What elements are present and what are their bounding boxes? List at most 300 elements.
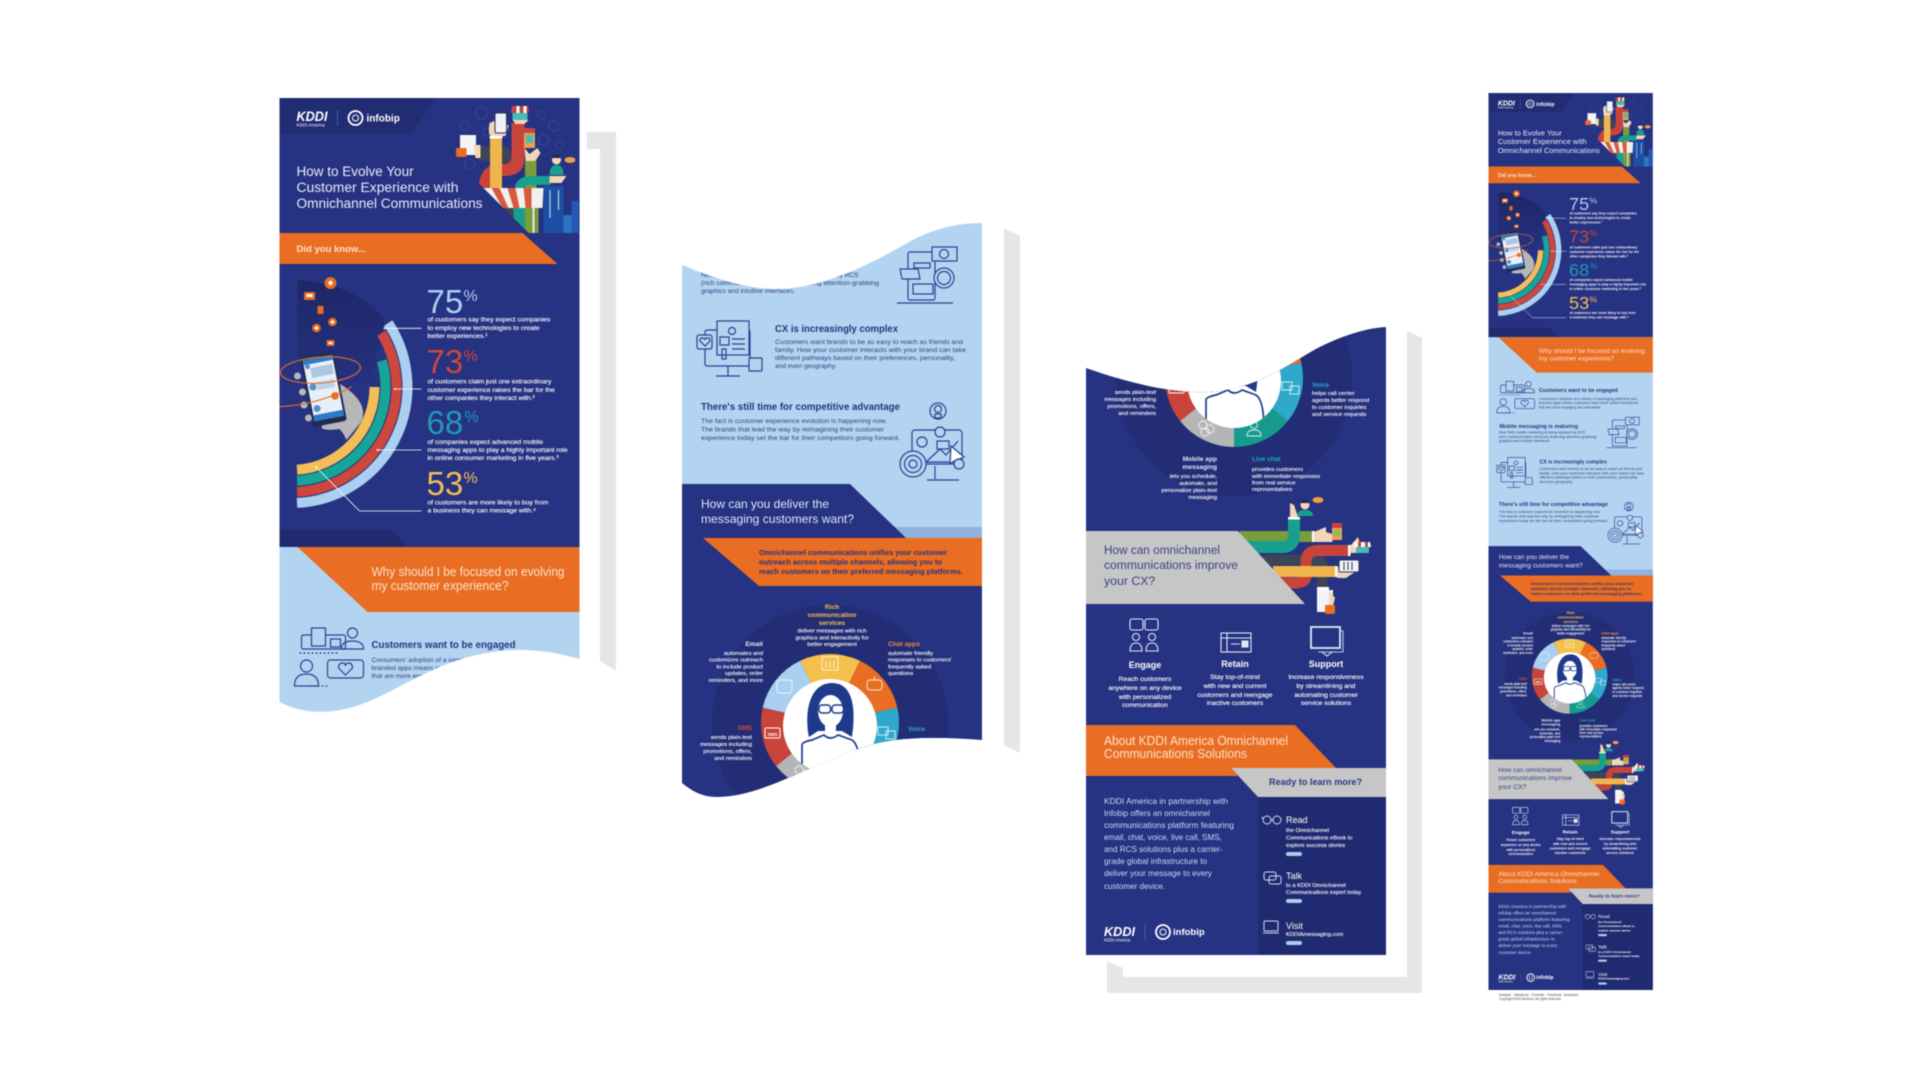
customers engaged text: Customers want to be engaged [372, 640, 516, 651]
why focus band: my customer experience? [1539, 356, 1614, 363]
stat 68%: of companies expect advanced mobile [1570, 278, 1633, 282]
contact: visit [1598, 972, 1630, 985]
orange omnichannel band: outreach across multiple channels, allowing you to [759, 558, 943, 566]
about body text [1498, 904, 1570, 955]
icon: mobile store [1606, 417, 1639, 448]
about body text: email, chat, voice, live call, SMS, [1498, 924, 1563, 928]
did you know band [1488, 166, 1641, 183]
contact: read: the Omnichannel [1598, 920, 1622, 924]
column: retain: with new and current [1203, 683, 1266, 690]
logo: KDDI America [1498, 107, 1514, 110]
why focus band [1498, 337, 1653, 373]
right contact column [1258, 797, 1386, 955]
deliver heading [1499, 554, 1583, 569]
label: mobile app messaging: personalize plain-text [1530, 735, 1560, 739]
label: live chat: representatives [1579, 735, 1602, 739]
contact: read: Communications eBook to [1598, 924, 1635, 928]
label: email: automates and [1512, 636, 1533, 640]
CX complex text: Customers want brands to be as easy to reach as friends and [1539, 467, 1642, 471]
label: mobile app messaging: automate, and [1540, 731, 1560, 735]
chart: channel wheel [1505, 612, 1634, 740]
stat 75%: of customers say they expect companies [1570, 212, 1637, 216]
customers engaged text: branded apps means customers want more varied interactions [372, 665, 554, 672]
label: email: Email [1523, 631, 1533, 635]
column: engage: with personalized [1506, 848, 1535, 852]
CX complex text: Customers want brands to be as easy to reach as friends and [775, 339, 963, 346]
competitive advantage text: The brands that lead the way by reimagining their customer [1499, 515, 1600, 519]
panel: page three, wheel, benefits and contact [1086, 260, 1386, 956]
bottom logo [1498, 973, 1553, 984]
CX complex text: different pathways based on their preferences, personality, [1539, 476, 1638, 480]
about body text [1104, 797, 1234, 891]
icons: engage, retain, support [1513, 807, 1629, 827]
label: SMS: SMS [1519, 677, 1527, 681]
icon: complex CX [1497, 457, 1532, 487]
stat 73%: of customers claim just one extraordinary [1570, 245, 1638, 249]
mobile messaging text: New SMS mobile marketing is being replaced by RCS [701, 272, 859, 279]
label: mobile app messaging: messaging [1545, 739, 1560, 743]
customers engaged text: Customers want to be engaged [1539, 388, 1618, 394]
column: retain [1197, 659, 1273, 707]
label: SMS: and reminders [1118, 411, 1156, 417]
right contact column [1583, 904, 1653, 990]
bottom logo [1104, 924, 1205, 942]
CX complex text: different pathways based on their preferences, personality, [775, 355, 955, 362]
contact: read: Read [1286, 815, 1308, 825]
bottom logo: KDDI America [1104, 938, 1131, 942]
column: engage: Engage [1512, 830, 1530, 836]
deliver heading: How can you deliver the [701, 497, 829, 511]
label: SMS: sends plain-text [711, 735, 752, 741]
sms bubble label: SMS [1535, 681, 1541, 684]
column: support: service solutions [1606, 851, 1634, 855]
deliver heading: How can you deliver the [1499, 554, 1569, 561]
stat 75%: % [464, 288, 478, 305]
label: rich communication services: communication [808, 612, 856, 619]
stat 75%: better experiences.¹ [428, 333, 488, 340]
bottom logo: infobip [1173, 927, 1205, 938]
about band [1086, 725, 1336, 776]
label: SMS: messages including [700, 742, 752, 748]
label: SMS: SMS [738, 725, 753, 732]
about body text: customer device. [1104, 882, 1165, 891]
column: support: Increase responsiveness [1599, 837, 1641, 841]
column: support: service solutions [1301, 700, 1352, 707]
label: chat apps: automate friendly [888, 651, 933, 657]
column: engage: communication [1508, 852, 1533, 856]
label: chat apps: responses to customers' [888, 658, 952, 664]
stat 75%: of customers say they expect companies [428, 316, 551, 324]
column: support: by streamlining and [1297, 683, 1356, 690]
stat 53%: 53 [426, 465, 463, 502]
column: engage: Engage [1129, 660, 1161, 670]
panel: page one, header and statistics [280, 98, 580, 717]
CX complex text [1539, 459, 1644, 484]
icon: engagement [1497, 381, 1535, 413]
shadow: panel 1 [587, 132, 616, 671]
logo: KDDI [296, 108, 328, 124]
grey heading band: How can omnichannel [1104, 543, 1220, 557]
grey heading band [1488, 759, 1609, 799]
orange omnichannel band [703, 538, 982, 586]
mobile messaging text: graphics and intuitive interfaces. [1499, 439, 1550, 443]
label: voice [1312, 382, 1369, 418]
contact: visit: KDDIAmessaging.com [1286, 932, 1343, 938]
title: Customer Experience with [1498, 137, 1587, 146]
customers engaged text: that are more engaging and interactive. [372, 673, 486, 680]
contact: visit: KDDIAmessaging.com [1598, 977, 1630, 981]
label: email: customizes outreach [1503, 640, 1533, 644]
label: voice: and service requests [1312, 412, 1366, 418]
about band: About KDDI America Omnichannel [1498, 871, 1600, 878]
customers engaged text [371, 640, 516, 679]
contact: talk: Communications expert today [1286, 890, 1361, 896]
competitive advantage text: There's still time for competitive advantage [701, 402, 900, 413]
shadow: panel 3 [1107, 331, 1422, 993]
stat 73%: customer experience raises the bar for the [1570, 250, 1639, 254]
orange omnichannel band: outreach across multiple channels, allowing you to [1531, 586, 1632, 591]
icon: growth target [900, 403, 964, 480]
contact: talk: to a KDDI Omnichannel [1286, 883, 1346, 889]
stat 73%: other companies they interact with.² [1570, 254, 1629, 258]
label: SMS: and reminders [714, 756, 752, 762]
label: chat apps: questions [888, 671, 913, 677]
CX complex text: family. How your customer interacts with your brand can take [1539, 471, 1644, 475]
column: retain: with new and current [1553, 842, 1587, 846]
label: voice: Voice [1312, 382, 1329, 389]
competitive advantage text: The brands that lead the way by reimagining their customer [701, 426, 885, 434]
grey heading band [1086, 531, 1305, 604]
label: live chat: from real service [1579, 731, 1604, 735]
chart: channel wheel [1116, 336, 1352, 496]
logo: KDDI America [296, 122, 325, 128]
icons: engage, retain, support [1130, 619, 1343, 656]
stat 75% [1569, 194, 1637, 225]
label: live chat: with immediate responses [1251, 474, 1320, 480]
stat 68% [1569, 260, 1646, 291]
label: SMS: promotions, offers, [1107, 404, 1156, 410]
label: SMS: promotions, offers, [703, 749, 752, 755]
orange omnichannel band [1500, 576, 1653, 602]
about body text: deliver your message to every [1104, 869, 1213, 878]
competitive advantage text [701, 402, 900, 442]
light section background [1488, 337, 1653, 577]
customers engaged text: Consumers' adoption of a variety of messaging platforms and [1539, 397, 1637, 401]
label: mobile app messaging: lets you schedule, [1534, 728, 1560, 732]
label: rich communication services: better engagement [1557, 631, 1584, 635]
stat 75% [426, 283, 551, 340]
stat 73%: customer experience raises the bar for the [428, 387, 555, 394]
ready to learn more band: Ready to learn more? [1269, 777, 1362, 787]
stat 53%: a business they can message with.⁴ [1570, 315, 1629, 319]
contact: read [1598, 914, 1635, 936]
panel: full infographic thumbnail [1488, 93, 1653, 990]
column: support: automating customer [1294, 692, 1358, 699]
label: rich communication services [795, 604, 869, 648]
label: SMS: promotions, offers, [1500, 689, 1527, 693]
why focus band: Why should I be focused on evolving [1539, 348, 1645, 355]
label: mobile app messaging: messaging [1183, 464, 1217, 471]
stat 53%: % [464, 470, 478, 487]
deliver heading [701, 497, 854, 526]
logo: KDDI [1498, 99, 1516, 108]
label: mobile app messaging: automate, and [1179, 481, 1217, 487]
mobile messaging text: Mobile messaging is maturing [1499, 424, 1578, 430]
icons: read, talk, visit [1585, 914, 1595, 978]
stat 68%: 68 [1569, 260, 1589, 280]
label: SMS: sends plain-text [1504, 682, 1527, 686]
label: chat apps [1601, 631, 1637, 651]
about body text: and RCS solutions plus a carrier- [1104, 845, 1223, 854]
about body text: communications platform featuring [1104, 821, 1234, 830]
footnote under thumbnail [1499, 993, 1579, 1001]
stat 68%: in online consumer marketing in five years.³ [428, 455, 559, 462]
column: engage: anywhere on any device [1501, 843, 1541, 847]
stat 75%: 75 [426, 283, 463, 320]
label: mobile app messaging: Mobile app [1183, 456, 1217, 463]
stat 53%: % [1589, 294, 1597, 304]
mobile messaging text: (rich communication services) featuring attention-grabbing [1499, 435, 1596, 439]
column: engage: Reach customers [1506, 838, 1535, 842]
mobile messaging text: graphics and intuitive interfaces. [701, 288, 795, 295]
column: support: by streamlining and [1604, 842, 1636, 846]
column: support [1288, 659, 1364, 707]
column: support: automating customer [1603, 847, 1638, 851]
column: engage [1501, 830, 1541, 856]
stat 75%: 75 [1569, 194, 1589, 214]
stat 68%: in online consumer marketing in five years.³ [1570, 287, 1642, 291]
label: email: to include product [716, 664, 763, 670]
stat 53%: a business they can message with.⁴ [428, 508, 536, 514]
customers engaged text: that are more engaging and interactive. [1539, 406, 1602, 410]
label: SMS: sends plain-text [1115, 390, 1156, 396]
label: voice [1612, 678, 1644, 698]
ready to learn more band: Ready to learn more? [1589, 894, 1640, 900]
label: rich communication services: services [1563, 620, 1578, 624]
footnote under thumbnail: Copyright KDDI America. All rights reserved. [1499, 997, 1562, 1001]
grey heading band: How can omnichannel [1498, 767, 1562, 774]
label: mobile app messaging: lets you schedule, [1170, 474, 1217, 480]
icons: read, talk, visit [1262, 816, 1281, 933]
label: email: Email [745, 641, 763, 648]
column: retain: Retain [1563, 829, 1578, 835]
label: live chat: Live chat [1252, 456, 1281, 463]
stat 73%: other companies they interact with.² [428, 395, 536, 402]
illustration: hands with tubes [1573, 741, 1645, 805]
competitive advantage text: The fact is customer experience evolution is happening now. [1499, 510, 1601, 514]
label: email: updates, order [725, 671, 763, 677]
stat 75%: to employ new technologies to create [1570, 216, 1631, 220]
grey heading band: communications improve [1104, 558, 1238, 572]
why focus band: my customer experience? [372, 579, 508, 593]
stat 53%: 53 [1569, 293, 1589, 313]
about body text: Infobip offers an omnichannel [1498, 910, 1556, 915]
label: SMS: SMS [1142, 380, 1157, 387]
stat 53%: of customers are more likely to buy from [428, 500, 549, 506]
label: live chat [1251, 456, 1320, 493]
customers engaged text [1539, 388, 1639, 410]
icon: complex CX [697, 321, 762, 376]
column: support: Support [1611, 829, 1630, 835]
stat 73%: % [1589, 228, 1597, 238]
label: live chat [1579, 718, 1617, 739]
chart: channel wheel [712, 606, 948, 796]
column: support: Support [1309, 659, 1343, 669]
orange omnichannel band: reach customers on their preferred messaging platforms. [759, 567, 963, 576]
about band: Communications Solutions [1104, 747, 1247, 761]
stat 73%: of customers claim just one extraordinary [428, 378, 552, 386]
logo [296, 108, 400, 128]
logo: infobip [366, 114, 400, 124]
bottom logo: infobip [1536, 975, 1553, 981]
label: mobile app messaging: personalize plain-text [1161, 488, 1217, 494]
column: retain: customers and reengage [1550, 847, 1591, 851]
about body text: customer device. [1498, 950, 1532, 955]
mobile messaging text: Mobile messaging is maturing [702, 259, 845, 270]
label: live chat: representatives [1252, 487, 1292, 493]
label: mobile app messaging [1161, 456, 1217, 501]
label: mobile app messaging: messaging [1541, 723, 1560, 727]
mobile messaging text: (rich communication services) featuring attention-grabbing [701, 280, 879, 287]
competitive advantage text [1499, 502, 1608, 523]
customers engaged text: Consumers' adoption of a variety of messaging platforms and [372, 657, 551, 664]
label: mobile app messaging: Mobile app [1541, 718, 1561, 722]
sms bubble label: SMS [768, 732, 777, 737]
icon: mobile store [897, 247, 957, 303]
label: mobile app messaging [1530, 718, 1561, 743]
label: rich communication services: graphics and interactivity for [795, 636, 869, 642]
contact: talk [1286, 871, 1361, 903]
label: voice: and service requests [1612, 694, 1643, 698]
label: SMS [700, 725, 753, 762]
label: chat apps: questions [1601, 647, 1616, 651]
about body text: grade global infrastructure to [1104, 857, 1208, 866]
title: Omnichannel Communications [1498, 146, 1600, 155]
CX complex text: CX is increasingly complex [1539, 459, 1607, 465]
label: SMS [1104, 390, 1157, 416]
competitive advantage text: experience today set the bar for their competitors going forward. [701, 435, 900, 442]
stat 53% [426, 471, 549, 515]
mobile messaging text [700, 272, 880, 296]
contact: visit: Visit [1286, 921, 1303, 931]
stat 68%: of companies expect advanced mobile [428, 439, 543, 446]
chart: concentric arcs with phone [280, 277, 422, 511]
light section background [280, 547, 580, 717]
stat 68%: messaging apps to play a highly important role [428, 447, 568, 454]
about body text: deliver your message to every [1498, 943, 1558, 948]
label: chat apps: frequently asked [1601, 644, 1625, 648]
logo [1498, 99, 1555, 110]
contact: talk: Communications expert today [1598, 954, 1640, 958]
title: Omnichannel Communications [296, 196, 483, 211]
column: retain: Retain [1221, 659, 1249, 669]
stat 73%: % [464, 348, 478, 365]
label: live chat: Live chat [1579, 718, 1596, 722]
label: email: to include product [1507, 644, 1533, 648]
about band: About KDDI America Omnichannel [1104, 734, 1288, 748]
why focus band [298, 547, 580, 612]
label: live chat: with immediate responses [1579, 728, 1617, 732]
label: email: reminders, and more [709, 678, 764, 684]
deliver heading: messaging customers want? [1499, 562, 1583, 569]
label: chat apps: responses to customers' [1601, 640, 1637, 644]
stat 73%: 73 [1569, 227, 1589, 247]
contact: talk: to a KDDI Omnichannel [1598, 950, 1631, 954]
contact: read: the Omnichannel [1286, 828, 1329, 834]
stat 68%: 68 [426, 404, 463, 441]
column: retain: inactive customers [1555, 851, 1586, 855]
about band: Communications Solutions [1498, 878, 1577, 885]
contact: read: explore success stories [1598, 928, 1631, 932]
stat 73% [1569, 227, 1639, 258]
column: retain [1550, 829, 1591, 855]
grey heading band: your CX? [1498, 784, 1527, 791]
why focus band: Why should I be focused on evolving [372, 565, 564, 579]
column: engage: with personalized [1118, 694, 1171, 701]
label: chat apps: Chat apps [888, 641, 920, 648]
competitive advantage text: There's still time for competitive advantage [1499, 502, 1608, 508]
icon: engagement [294, 628, 364, 686]
stat 73%: 73 [426, 343, 463, 380]
label: email [709, 641, 764, 684]
column: retain: customers and reengage [1197, 692, 1273, 699]
CX complex text [775, 324, 966, 370]
label: rich communication services: deliver messages with rich [1552, 624, 1590, 628]
label: SMS: and reminders [1506, 693, 1527, 697]
column: engage: communication [1122, 702, 1168, 709]
orange omnichannel band: reach customers on their preferred messaging platforms. [1531, 591, 1642, 596]
label: chat apps: automate friendly [1601, 636, 1627, 640]
label: chat apps: Chat apps [1601, 631, 1619, 635]
label: chat apps [888, 641, 952, 677]
CX complex text: family. How your customer interacts with your brand can take [775, 347, 966, 354]
ready to learn more band [1568, 888, 1653, 904]
about body text: KDDI America in partnership with [1104, 797, 1228, 806]
orange omnichannel band: Omnichannel communications unifies your customer [1531, 581, 1634, 586]
did you know band: Did you know... [1498, 173, 1536, 179]
illustration: hands and storefront [1585, 97, 1652, 166]
label: rich communication services: services [819, 620, 846, 627]
stat 53% [1569, 293, 1636, 319]
label: SMS [1498, 677, 1527, 697]
contact: talk [1598, 945, 1640, 962]
title [296, 164, 483, 211]
label: voice: to customer inquiries [1312, 405, 1366, 411]
label: email: automates and [724, 651, 763, 657]
column: engage: Reach customers [1119, 676, 1172, 683]
label: rich communication services: communication [1557, 616, 1584, 620]
label: chat apps: frequently asked [888, 664, 931, 670]
stat 53%: of customers are more likely to buy from [1570, 311, 1636, 315]
about body text: Infobip offers an omnichannel [1104, 809, 1210, 818]
title [1498, 128, 1600, 155]
panel: page two, benefits and channels [682, 221, 982, 841]
column: retain: Stay top-of-mind [1210, 674, 1260, 681]
contact: read: Read [1598, 914, 1610, 920]
label: voice: Voice [908, 726, 925, 733]
label: voice: helps call center [1312, 391, 1355, 397]
bottom logo: KDDI [1104, 924, 1135, 939]
about body text: grade global infrastructure to [1498, 937, 1555, 942]
label: rich communication services: graphics and interactivity for [1551, 628, 1592, 632]
contact: talk: Talk [1286, 871, 1303, 881]
contact: read: explore success stories [1286, 843, 1345, 849]
column: support [1599, 829, 1641, 855]
label: SMS: messages including [1104, 397, 1156, 403]
label: email: customizes outreach [709, 658, 763, 664]
competitive advantage text: The fact is customer experience evolution is happening now. [701, 418, 887, 425]
stat 68% [426, 404, 568, 462]
